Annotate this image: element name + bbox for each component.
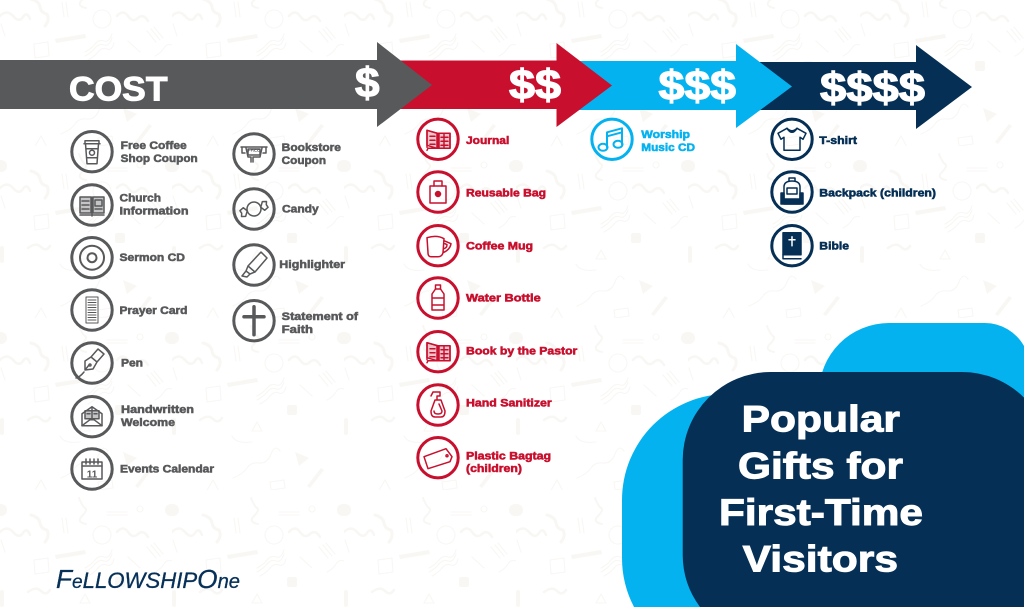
item: worship music CD [592,119,695,160]
item: plastic bagtag [418,438,551,478]
item: candy [234,189,320,229]
item: book by the pastor: Book by the Pastor [466,345,578,357]
item: worship music CD: Music CD [641,142,695,154]
cost arrow: gray tier with COST heading: $ [355,59,380,106]
item: plastic bagtag: Plastic Bagtag [466,450,551,462]
panel: higher cost gift [592,119,695,160]
item: statement of faith: Faith [282,324,313,336]
item: sermon CD: Sermon CD [120,252,185,264]
item: church information [72,185,189,225]
item: t-shirt [772,119,857,160]
item: prayer card: Prayer Card [120,305,188,317]
item: prayer card [72,290,188,330]
item: pen: Pen [121,358,143,370]
cost arrow: gray tier with COST heading [0,42,432,127]
item: events calendar: Events Calendar [120,464,215,476]
item: bible: Bible [819,240,849,252]
cost arrow: gray tier with COST heading: COST [69,70,168,108]
item: bookstore coupon: FREE [248,148,260,152]
title: First-Time [719,492,923,533]
cost arrow: navy tier: $$$$ [820,64,925,111]
item: church information: Church [120,193,161,205]
item: water bottle [418,278,541,318]
item: coffee mug [418,226,533,266]
item: coffee coupon [72,132,198,172]
cost arrow: navy tier [740,45,972,129]
item: journal: Journal [466,135,509,147]
title: Visitors [743,539,898,580]
title card blobs and heading [622,323,1024,607]
item: sermon CD [72,238,185,278]
item: reusable bag: Reusable Bag [466,188,546,200]
item: backpack [772,172,936,212]
item: handwritten welcome: Welcome [121,417,175,429]
item: coffee mug: Coffee Mug [466,240,533,252]
title: Gifts for [738,445,903,486]
panel: lowest cost gifts, column two [234,134,358,341]
item: handwritten welcome [72,396,194,437]
item: statement of faith [234,300,358,341]
item: statement of faith: Statement of [282,311,358,323]
panel: lowest cost gifts, column one [72,132,215,489]
panel: medium cost gifts [418,119,578,478]
item: events calendar: 11 [87,470,98,480]
item: water bottle: Water Bottle [466,293,541,305]
item: worship music CD: Worship [641,129,690,141]
item: handwritten welcome: Handwritten [121,404,194,416]
item: t-shirt: T-shirt [819,135,857,147]
item: candy: Candy [282,204,320,216]
item: hand sanitizer [418,385,553,425]
item: book by the pastor [418,332,578,372]
logo: FellowshipOne: FeLLOWSHIPOne [56,564,240,594]
cost arrow: light blue tier [560,44,792,128]
cost arrow: red tier: $$ [509,61,561,108]
item: coffee coupon: Free Coffee [121,140,187,152]
item: highlighter: Highlighter [279,259,346,271]
cost arrow: light blue tier: $$$ [658,62,736,109]
item: bookstore coupon: Bookstore [282,142,341,154]
item: pen [72,343,143,383]
panel: highest cost gifts [772,119,936,266]
title [719,399,923,580]
item: coffee coupon: Shop Coupon [121,153,198,165]
item: bookstore coupon [234,134,341,174]
item: highlighter [234,245,346,285]
item: journal [418,119,509,160]
item: bible [772,226,849,266]
item: hand sanitizer: Hand Sanitizer [466,398,553,410]
item: backpack: Backpack (children) [819,188,936,200]
cost arrow: red tier [380,43,612,127]
item: bookstore coupon: Coupon [282,155,326,167]
title: Popular [742,399,900,440]
item: events calendar [72,449,215,489]
item: plastic bagtag: (children) [466,463,522,475]
item: reusable bag [418,172,546,212]
item: church information: Information [120,206,189,218]
